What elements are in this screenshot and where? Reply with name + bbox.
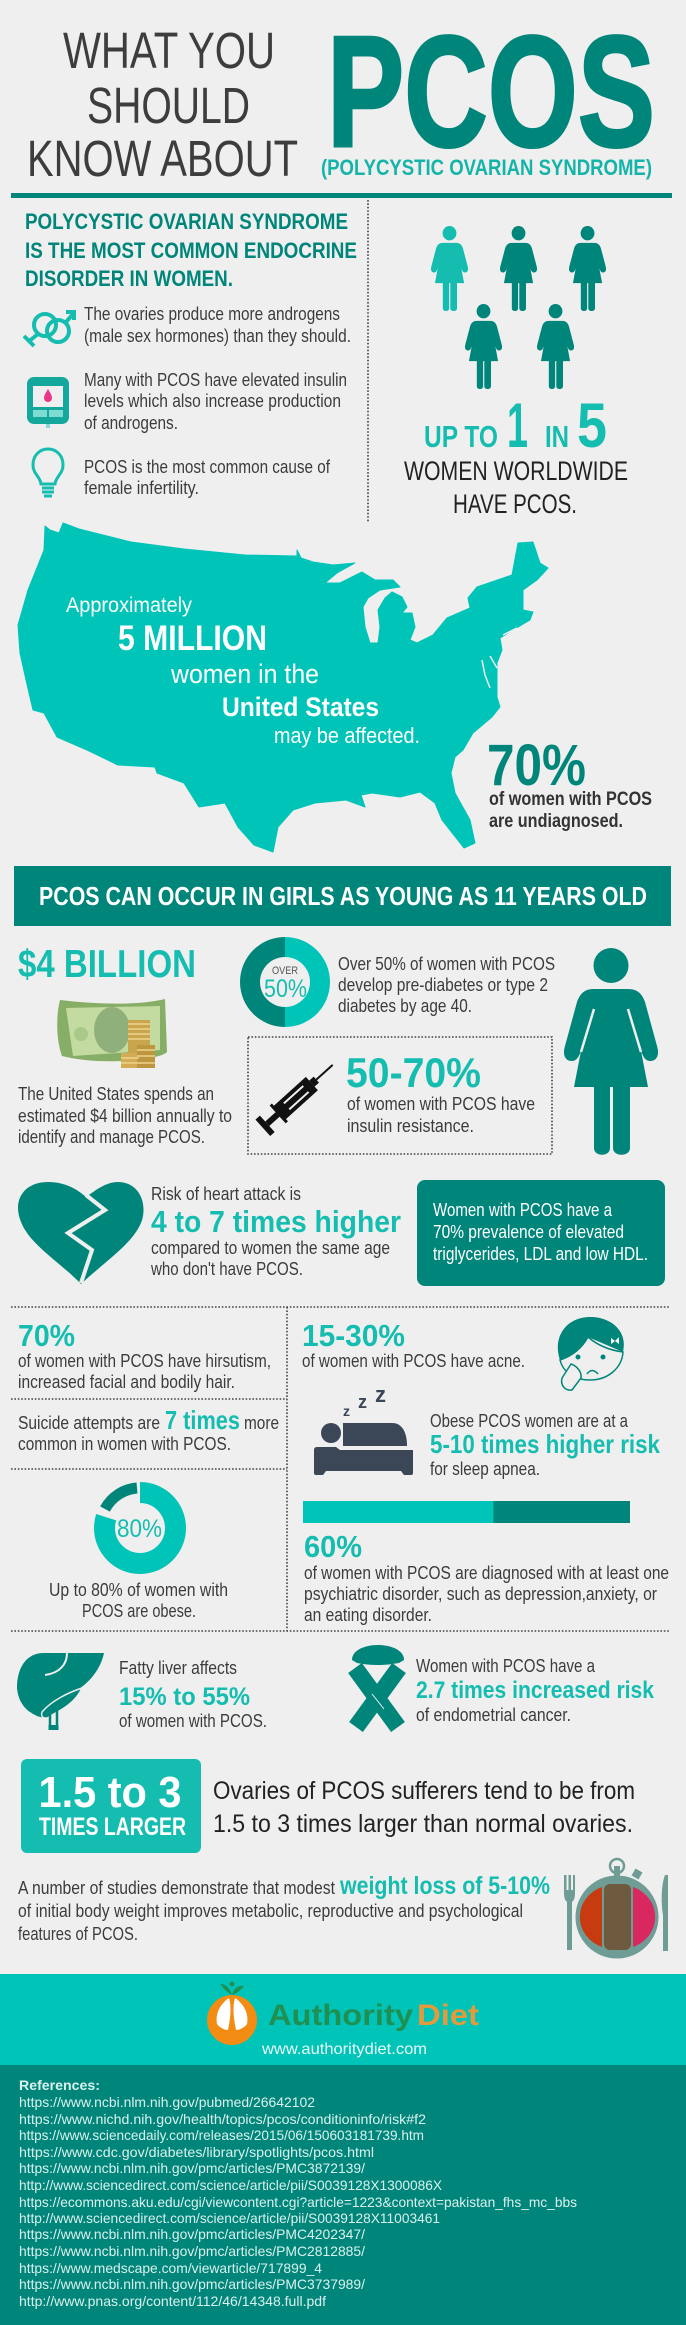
text: endometrial cancer: [416, 1656, 655, 1725]
panel: references: https://ecommons.aku.edu/cgi/viewcontent.cgi?article=1223&context=pakistan_fhs_mc_bbs: [19, 2194, 577, 2210]
chart: over 50% donut: OVER: [272, 965, 298, 977]
panel: references: References:: [19, 2077, 100, 2093]
panel: footer brand: Diet: [417, 1999, 479, 2032]
text: fatty liver: 15% to 55%: [119, 1683, 250, 1711]
icon: ribbon: [352, 1645, 404, 1727]
icon: light bulb: [33, 449, 63, 496]
icon: sleeping person: z: [358, 1392, 367, 1412]
stat: 70% undiagnosed: of women with PCOS: [489, 789, 652, 810]
text: women worldwide: HAVE PCOS.: [453, 489, 577, 519]
text: weight loss: [18, 1872, 550, 1944]
panel: references: http://www.sciencedirect.com/science/article/pii/S0039128X1300086X: [19, 2177, 443, 2193]
text: sleep apnea: Obese PCOS women are at a: [430, 1411, 629, 1431]
callout: 1.5 to 3 times larger: TIMES LARGER: [39, 1813, 186, 1841]
stat: 70% undiagnosed: are undiagnosed.: [489, 811, 623, 832]
text: spending: [18, 1084, 232, 1147]
text: sleep apnea: [430, 1411, 660, 1479]
text: pre-diabetes: develop pre-diabetes or type 2: [338, 975, 548, 995]
banner: girls as young as 11: [14, 866, 671, 926]
heading: POLYCYSTIC OVARIAN SYNDROME: [25, 209, 348, 234]
text: pre-diabetes: [338, 954, 555, 1016]
callout: triglycerides: [417, 1180, 665, 1286]
icon: gender symbols: [24, 312, 74, 346]
chart: 60% bar: [303, 1501, 630, 1523]
text: weight loss: features of PCOS.: [18, 1924, 138, 1944]
text: weight loss: A number of studies demonstrate that modest: [18, 1878, 335, 1898]
text: androgens: [84, 304, 351, 346]
chart: over 50% donut: 50%: [264, 975, 307, 1003]
text: obese: [49, 1580, 228, 1621]
text: spending: identify and manage PCOS.: [18, 1127, 205, 1147]
icon: money and coins: [57, 999, 167, 1068]
stat: up to 1 in 5: 5: [577, 391, 607, 461]
stat: 70% undiagnosed: 70%: [487, 733, 586, 798]
icon: girl with acne: [558, 1317, 624, 1390]
title: KNOW ABOUT: [27, 130, 298, 187]
text: psychiatric disorder: an eating disorder.: [304, 1605, 432, 1625]
title rule: [11, 193, 672, 198]
panel: references: https://www.sciencedaily.com/releases/2015/06/150603181739.htm: [19, 2127, 424, 2143]
panel: references: https://www.cdc.gov/diabetes/library/spotlights/pcos.html: [19, 2144, 374, 2160]
text: 5 million women: United States: [222, 692, 379, 722]
text: psychiatric disorder: [304, 1529, 669, 1625]
text: 5 million women: 5 MILLION: [118, 619, 267, 658]
text: pre-diabetes: Over 50% of women with PCOS: [338, 954, 555, 974]
icon: five women: [431, 226, 606, 389]
text: 5 million women: may be affected.: [274, 723, 420, 748]
text: hirsutism: [18, 1318, 271, 1392]
text: acne: of women with PCOS have acne.: [302, 1351, 525, 1371]
text: acne: 15-30%: [302, 1318, 405, 1353]
stat: up to 1 in 5: [424, 391, 607, 461]
text: hirsutism: 70%: [18, 1318, 75, 1353]
panel: references: https://www.ncbi.nlm.nih.gov/pmc/articles/PMC3737989/: [19, 2276, 365, 2292]
text: suicide attempts: more: [244, 1413, 279, 1433]
text: ovaries: [213, 1777, 635, 1838]
heading: DISORDER IN WOMEN.: [25, 266, 233, 291]
callout: insulin resistance: of women with PCOS have: [347, 1094, 535, 1114]
icon: sleeping person: z: [375, 1382, 386, 1407]
text: endometrial cancer: 2.7 times increased risk: [416, 1677, 655, 1704]
panel: 1 in 5 women: [404, 226, 628, 519]
text: hirsutism: of women with PCOS have hirsutism,: [18, 1351, 271, 1371]
text: insulin: levels which also increase production: [84, 391, 341, 411]
text: heart attack risk: compared to women the same age: [151, 1238, 390, 1258]
chart: 80% donut: 80%: [117, 1515, 162, 1543]
text: women worldwide: WOMEN WORLDWIDE: [404, 456, 628, 486]
icon: sleeping person: [314, 1382, 413, 1475]
callout: triglycerides: 70% prevalence of elevated: [433, 1222, 624, 1242]
stat: up to 1 in 5: IN: [545, 419, 569, 454]
text: heart attack risk: who don't have PCOS.: [150, 1259, 303, 1279]
icon: plate stopwatch: [564, 1859, 668, 1958]
text: sleep apnea: for sleep apnea.: [430, 1459, 540, 1479]
chart: 80% donut: [104, 1488, 176, 1564]
panel: references: https://www.medscape.com/viewarticle/717899_4: [19, 2260, 322, 2276]
stat: 70% undiagnosed: [487, 733, 652, 832]
icon: syringe: [255, 1056, 341, 1137]
text: suicide attempts: 7 times: [165, 1405, 240, 1435]
panel: footer brand: Authority: [268, 1999, 413, 2032]
panel: references: https://www.ncbi.nlm.nih.gov/pmc/articles/PMC2812885/: [19, 2243, 365, 2259]
text: acne: [302, 1318, 525, 1371]
panel: references: https://www.ncbi.nlm.nih.gov/pubmed/26642102: [19, 2094, 315, 2110]
text: spending: estimated $4 billion annually to: [18, 1106, 232, 1126]
text: insulin: Many with PCOS have elevated insulin: [84, 370, 347, 390]
title: SHOULD: [87, 77, 250, 134]
callout: triglycerides: Women with PCOS have a: [433, 1200, 613, 1220]
text: suicide attempts: Suicide attempts are: [18, 1413, 160, 1433]
text: ovaries: Ovaries of PCOS sufferers tend to be from: [213, 1777, 635, 1805]
text: 5 million women: women in the: [170, 659, 319, 689]
callout: 1.5 to 3 times larger: [21, 1759, 201, 1853]
text: ovaries: 1.5 to 3 times larger than normal ovaries.: [213, 1810, 633, 1838]
icon: liver: [17, 1653, 104, 1730]
text: insulin: of androgens.: [84, 413, 178, 433]
panel: references: https://www.nichd.nih.gov/health/topics/pcos/conditioninfo/risk#f2: [19, 2111, 426, 2127]
icon: big woman: [564, 948, 658, 1155]
panel: references: https://www.ncbi.nlm.nih.gov/pmc/articles/PMC3872139/: [19, 2160, 365, 2176]
callout: insulin resistance: insulin resistance.: [347, 1116, 474, 1136]
text: fatty liver: Fatty liver affects: [119, 1658, 237, 1678]
title: [27, 4, 655, 187]
text: fatty liver: [119, 1658, 267, 1731]
icon: Authority Diet logo: [207, 1982, 257, 2045]
text: infertility: female infertility.: [84, 478, 199, 498]
text: endometrial cancer: of endometrial cancer.: [416, 1705, 571, 1725]
text: hirsutism: increased facial and bodily hair.: [18, 1372, 235, 1392]
text: obese: Up to 80% of women with: [49, 1580, 228, 1600]
heading: IS THE MOST COMMON ENDOCRINE: [25, 238, 357, 263]
text: pre-diabetes: diabetes by age 40.: [338, 996, 472, 1016]
text: androgens: The ovaries produce more androgens: [84, 304, 340, 324]
map: United States: [18, 523, 548, 852]
panel: 4 billion cost: [18, 943, 232, 1147]
panel: references: [0, 2065, 686, 2325]
text: androgens: (male sex hormones) than they should.: [84, 326, 351, 346]
text: heart attack risk: 4 to 7 times higher: [151, 1204, 401, 1239]
text: obese: PCOS are obese.: [82, 1601, 196, 1621]
panel: references: http://www.pnas.org/content/112/46/14348.full.pdf: [19, 2293, 326, 2309]
icon: broken heart: [18, 1182, 144, 1284]
panel: references: http://www.sciencedirect.com/science/article/pii/S0039128X11003461: [19, 2210, 440, 2226]
panel: 4 billion cost: $4 BILLION: [18, 943, 196, 986]
text: endometrial cancer: Women with PCOS have a: [416, 1656, 596, 1676]
text: infertility: [84, 457, 331, 498]
title: WHAT YOU: [63, 22, 275, 79]
stat: up to 1 in 5: UP TO: [424, 419, 498, 454]
callout: triglycerides: triglycerides, LDL and low HDL.: [433, 1244, 648, 1264]
text: fatty liver: of women with PCOS.: [119, 1711, 267, 1731]
chart: over 50% donut: [240, 937, 330, 1027]
text: psychiatric disorder: 60%: [304, 1529, 362, 1564]
text: 5 million women: Approximately: [66, 594, 192, 617]
icon: sleeping person: z: [343, 1403, 350, 1419]
text: suicide attempts: common in women with PCOS.: [18, 1434, 231, 1454]
text: spending: The United States spends an: [18, 1084, 214, 1104]
panel: references: https://www.ncbi.nlm.nih.gov/pmc/articles/PMC4202347/: [19, 2226, 365, 2242]
text: suicide attempts: [18, 1405, 279, 1454]
callout: insulin resistance: 50-70%: [346, 1049, 481, 1096]
text: infertility: PCOS is the most common cause of: [84, 457, 331, 477]
stat: up to 1 in 5: 1: [507, 391, 528, 461]
icon: glucose meter: [27, 377, 69, 428]
text: weight loss: of initial body weight improves metabolic, reproductive and psychological: [18, 1901, 523, 1921]
text: heart attack risk: Risk of heart attack is: [151, 1184, 301, 1204]
text: weight loss: weight loss of 5-10%: [339, 1872, 550, 1900]
panel: endocrine disorder facts: [24, 209, 357, 498]
text: insulin: [84, 370, 347, 433]
text: heart attack risk: [150, 1184, 401, 1279]
callout: insulin resistance: [248, 1037, 552, 1154]
panel: footer brand: www.authoritydiet.com: [261, 2041, 427, 2058]
panel: footer brand: [0, 1974, 686, 2065]
heading: [25, 209, 357, 291]
text: women worldwide: [404, 456, 628, 519]
callout: 1.5 to 3 times larger: 1.5 to 3: [38, 1768, 182, 1817]
text: 5 million women: [66, 594, 420, 748]
